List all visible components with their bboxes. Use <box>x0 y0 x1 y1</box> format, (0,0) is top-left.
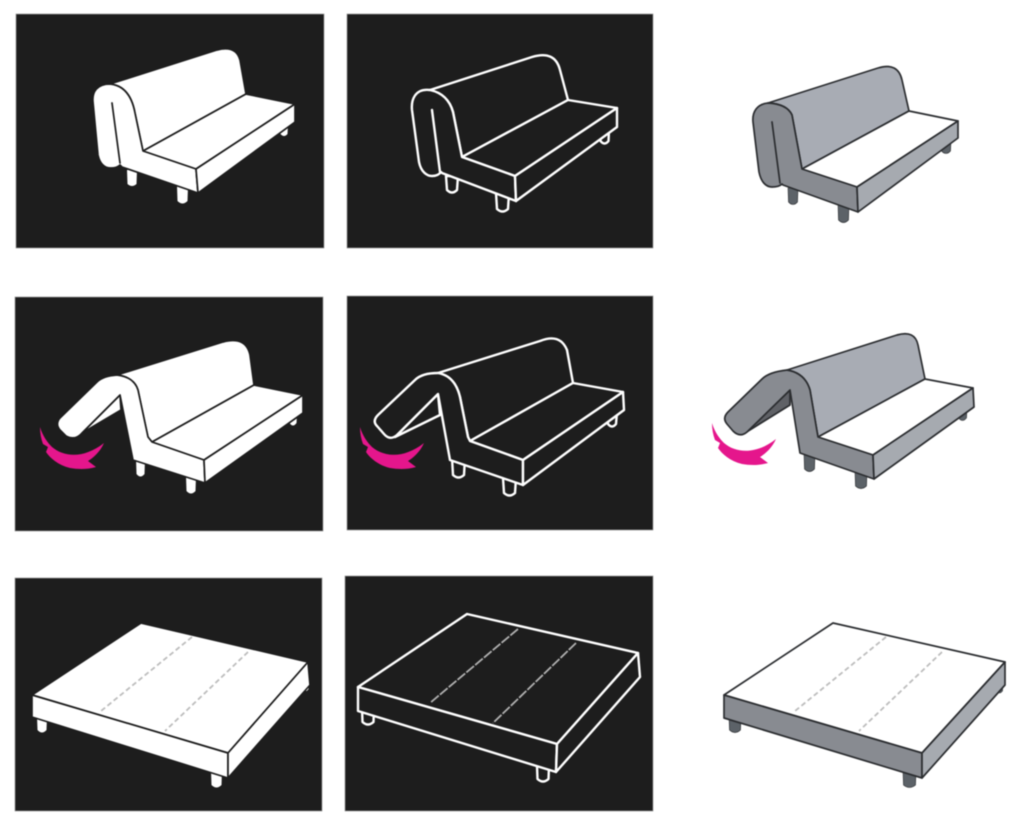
panel: flat bed, solid white <box>15 578 322 811</box>
bed flat outline <box>358 614 640 782</box>
sofa folding outline <box>375 338 624 496</box>
sofa folding white <box>58 341 303 494</box>
panel: flat bed, outline <box>345 576 653 811</box>
arrow: fold down <box>40 427 104 469</box>
sofa upright white <box>93 49 295 204</box>
sofa upright grey <box>753 66 958 222</box>
sofa folding grey <box>725 334 974 488</box>
arrow: fold down <box>712 423 776 465</box>
panel: sofa upright, grey <box>753 66 958 222</box>
bed flat grey <box>724 623 1005 788</box>
bed flat white <box>32 623 310 788</box>
panel: arm folding, outline <box>347 296 653 530</box>
arrow: fold down <box>360 427 424 469</box>
panel: sofa upright, solid white <box>16 14 324 248</box>
panel: sofa upright, outline <box>347 14 653 248</box>
panel: arm folding, grey <box>712 334 974 488</box>
panel: arm folding, solid white <box>15 297 323 531</box>
sofa upright outline <box>412 55 617 212</box>
panel: flat bed, grey <box>724 623 1005 788</box>
